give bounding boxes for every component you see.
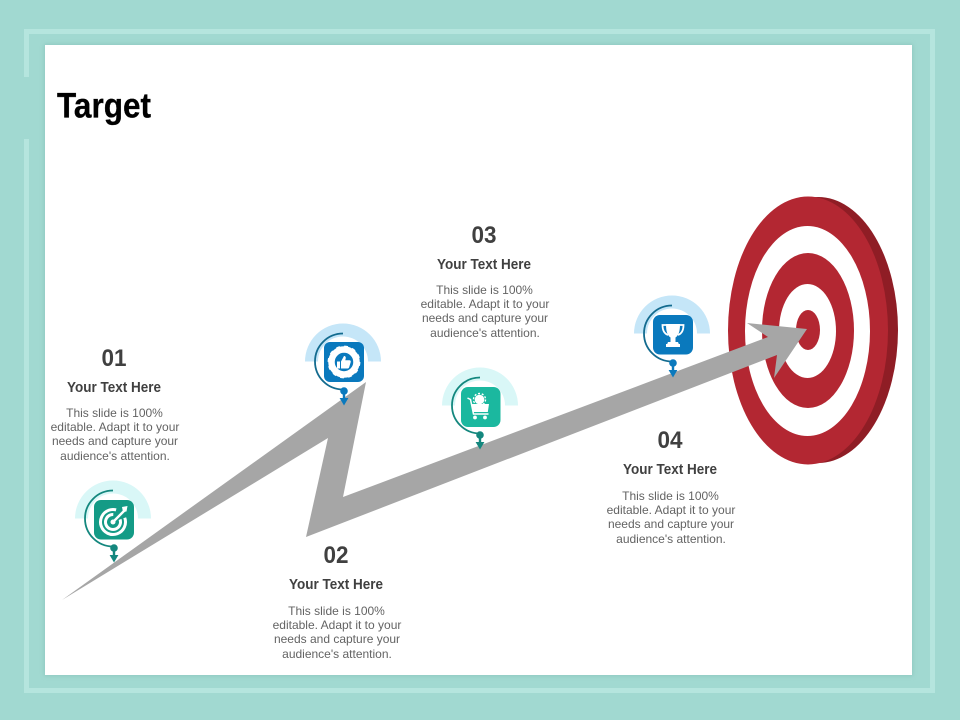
cart glyph	[471, 394, 489, 419]
step 02 text: needs and capture your	[274, 632, 400, 646]
step 03 text: 03	[472, 222, 496, 249]
step 01 text	[51, 345, 179, 463]
title: Target	[57, 86, 151, 126]
step 04 text	[607, 427, 735, 546]
step 03 text: needs and capture your	[422, 311, 548, 325]
step 01 text: audience's attention.	[60, 449, 170, 463]
icon: thumbs up badge pin 02	[305, 324, 381, 406]
step 03 text: This slide is 100%	[436, 283, 533, 297]
step 03 text: audience's attention.	[430, 326, 540, 340]
step 02 text: Your Text Here	[289, 576, 383, 593]
step 04 text: This slide is 100%	[622, 489, 719, 503]
step 02 text	[273, 542, 401, 661]
step 03 text: Your Text Here	[437, 256, 531, 273]
step 02 text: 02	[324, 542, 348, 569]
step 04 text: 04	[658, 427, 683, 454]
icon: shopping cart pin 03	[442, 368, 518, 450]
step 01 text: editable. Adapt it to your	[51, 420, 179, 434]
step 01 text: 01	[102, 345, 126, 372]
icon: target pin 01	[75, 480, 151, 562]
step 01 text: This slide is 100%	[66, 406, 163, 420]
step 01 text: needs and capture your	[52, 434, 178, 448]
step 04 text: needs and capture your	[608, 517, 734, 531]
step 02 text: editable. Adapt it to your	[273, 618, 401, 632]
step 04 text: Your Text Here	[623, 461, 717, 478]
zigzag arrow	[62, 323, 807, 600]
step 04 text: audience's attention.	[616, 532, 726, 546]
step 02 text: audience's attention.	[282, 647, 392, 661]
white panel	[44, 44, 913, 676]
step 03 text	[421, 222, 549, 340]
step 04 text: editable. Adapt it to your	[607, 503, 735, 517]
step 03 text: editable. Adapt it to your	[421, 297, 549, 311]
step 01 text: Your Text Here	[67, 379, 161, 396]
target bullseye	[728, 196, 898, 464]
step 02 text: This slide is 100%	[288, 604, 385, 618]
icon: trophy pin 04	[634, 296, 710, 378]
